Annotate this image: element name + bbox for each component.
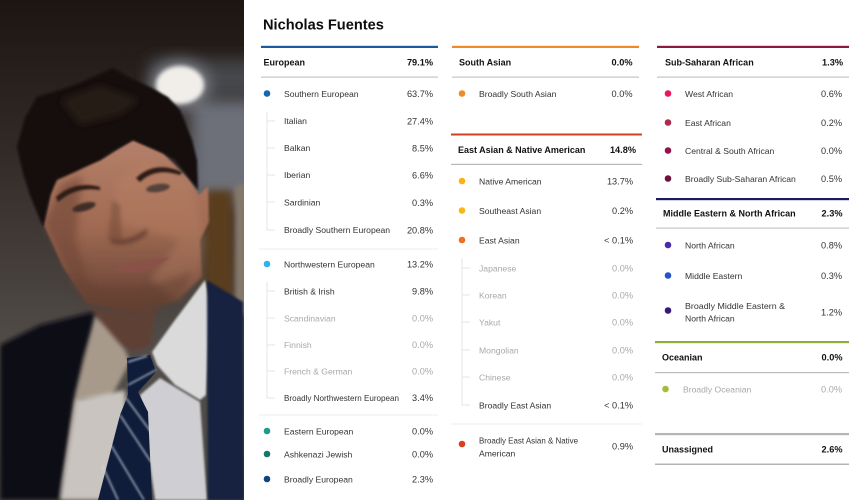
row: Broadly East Asian & Native American: 0.9% bbox=[612, 442, 633, 452]
row: Broadly Middle Eastern & North African: 1.2% bbox=[821, 308, 842, 318]
row: Broadly South Asian: 0.0% bbox=[612, 89, 632, 99]
row: Broadly Northwestern European: Broadly Northwestern European bbox=[284, 393, 399, 403]
panel: European bbox=[259, 46, 438, 485]
row: Southern European bbox=[264, 89, 433, 99]
row: Broadly European: Broadly European bbox=[284, 474, 353, 484]
row: East Asian bbox=[459, 236, 633, 246]
row: Middle Eastern bbox=[665, 271, 842, 281]
panel: Unassigned: 2.6% bbox=[822, 444, 842, 454]
panel: East Asian & Native American: 14.8% bbox=[610, 145, 636, 155]
panel: East Asian & Native American: East Asian & Native American bbox=[458, 145, 585, 155]
row: Southern European: Southern European bbox=[284, 89, 359, 99]
row: Chinese: Chinese bbox=[479, 372, 511, 382]
row: Korean: 0.0% bbox=[612, 290, 633, 300]
row: Broadly East Asian & Native American: Broadly East Asian & Native bbox=[479, 436, 578, 446]
row: Southern European: 63.7% bbox=[407, 89, 433, 99]
row: Broadly Middle Eastern & North African: North African bbox=[685, 314, 735, 324]
row: Iberian: Iberian bbox=[284, 170, 310, 180]
row: Yakut: 0.0% bbox=[612, 318, 633, 328]
row: Broadly East Asian: Broadly East Asian bbox=[479, 400, 551, 410]
row: Broadly European: 2.3% bbox=[412, 474, 433, 484]
row: Eastern European: Eastern European bbox=[284, 426, 353, 436]
row: Mongolian bbox=[479, 346, 633, 356]
row: Broadly East Asian bbox=[479, 400, 633, 410]
row: West African: West African bbox=[685, 89, 733, 99]
row: Broadly Southern European: Broadly Southern European bbox=[284, 225, 390, 235]
row: Broadly Sub-Saharan African: 0.5% bbox=[821, 174, 842, 184]
row: Sardinian: Sardinian bbox=[284, 198, 321, 208]
row: Broadly East Asian: < 0.1% bbox=[604, 400, 633, 410]
row: Korean: Korean bbox=[479, 290, 507, 300]
row: Balkan bbox=[284, 143, 433, 154]
row: Southeast Asian: Southeast Asian bbox=[479, 206, 541, 216]
row: Balkan: Balkan bbox=[284, 143, 310, 153]
row: Central & South African: Central & South African bbox=[685, 146, 775, 156]
row: Native American bbox=[459, 176, 633, 186]
panel: portrait photo bbox=[0, 0, 260, 500]
title: Nicholas Fuentes bbox=[263, 18, 384, 34]
row: North African bbox=[665, 240, 842, 250]
row: Scandinavian: 0.0% bbox=[412, 314, 433, 324]
row: Broadly Oceanian: Broadly Oceanian bbox=[683, 384, 752, 394]
row: Broadly East Asian & Native American: American bbox=[479, 448, 516, 458]
row: British & Irish: British & Irish bbox=[284, 286, 335, 296]
panel: Sub-Saharan African: 1.3% bbox=[822, 58, 843, 68]
row: Broadly Northwestern European: 3.4% bbox=[412, 393, 433, 403]
row: French & German: French & German bbox=[284, 366, 353, 376]
row: Finnish: Finnish bbox=[284, 340, 312, 350]
row: Japanese: Japanese bbox=[479, 264, 516, 274]
panel: South Asian bbox=[452, 46, 639, 99]
row: Eastern European bbox=[264, 426, 433, 436]
row: West African: 0.6% bbox=[821, 89, 842, 99]
row: North African: 0.8% bbox=[821, 240, 842, 250]
row: Ashkenazi Jewish: Ashkenazi Jewish bbox=[284, 450, 353, 460]
row: Korean bbox=[479, 290, 633, 300]
row: Broadly Oceanian bbox=[662, 384, 842, 394]
row: Balkan: 8.5% bbox=[412, 144, 433, 154]
panel: European: European bbox=[264, 58, 305, 68]
row: Northwestern European: 13.2% bbox=[407, 260, 433, 270]
row: Finnish bbox=[284, 340, 433, 350]
panel: Unassigned: Unassigned bbox=[662, 444, 713, 454]
row: Broadly Middle Eastern & North African bbox=[665, 301, 842, 324]
row: French & German: 0.0% bbox=[412, 366, 433, 376]
row: Italian bbox=[284, 116, 433, 126]
row: Broadly Sub-Saharan African bbox=[665, 174, 842, 184]
row: East African: 0.2% bbox=[821, 118, 842, 128]
panel: South Asian: 0.0% bbox=[612, 58, 632, 68]
panel: Oceanian: 0.0% bbox=[822, 352, 842, 362]
row: British & Irish: 9.8% bbox=[412, 286, 433, 296]
row: Ashkenazi Jewish: 0.0% bbox=[412, 450, 433, 460]
row: East African bbox=[665, 118, 842, 128]
panel: Sub-Saharan African bbox=[657, 46, 849, 184]
row: Broadly Sub-Saharan African: Broadly Sub-Saharan African bbox=[685, 174, 796, 184]
row: Broadly European bbox=[264, 474, 433, 484]
row: Finnish: 0.0% bbox=[412, 340, 433, 350]
row: Yakut bbox=[479, 318, 633, 328]
row: East African: East African bbox=[685, 118, 731, 128]
panel: Middle Eastern & North African: 2.3% bbox=[822, 208, 842, 218]
row: Southeast Asian: 0.2% bbox=[612, 206, 633, 216]
row: East Asian: < 0.1% bbox=[604, 236, 633, 246]
icon: striped tie bbox=[98, 355, 156, 500]
row: North African: North African bbox=[685, 240, 735, 250]
row: Japanese: 0.0% bbox=[612, 264, 633, 274]
row: French & German bbox=[284, 366, 433, 376]
row: Central & South African: 0.0% bbox=[821, 146, 842, 156]
panel: Middle Eastern & North African: Middle Eastern & North African bbox=[663, 208, 796, 218]
row: British & Irish bbox=[284, 286, 433, 296]
row: West African bbox=[665, 89, 842, 99]
row: Broadly South Asian: Broadly South Asian bbox=[479, 89, 557, 99]
row: Italian: 27.4% bbox=[407, 116, 433, 126]
row: Broadly Middle Eastern & North African: Broadly Middle Eastern & bbox=[685, 301, 785, 311]
panel: Oceanian bbox=[655, 341, 849, 394]
row: Broadly South Asian bbox=[459, 89, 632, 99]
row: Iberian bbox=[284, 170, 433, 180]
row: Chinese bbox=[479, 372, 633, 382]
panel: Middle Eastern & North African bbox=[656, 198, 849, 324]
row: Middle Eastern: 0.3% bbox=[821, 271, 842, 281]
row: Eastern European: 0.0% bbox=[412, 426, 433, 436]
row: Ashkenazi Jewish bbox=[264, 450, 433, 460]
row: Native American: 13.7% bbox=[607, 176, 633, 186]
row: Sardinian bbox=[284, 198, 433, 208]
panel: Sub-Saharan African: Sub-Saharan African bbox=[665, 58, 754, 68]
row: Scandinavian bbox=[284, 314, 433, 324]
row: Mongolian: Mongolian bbox=[479, 346, 519, 356]
row: Mongolian: 0.0% bbox=[612, 346, 633, 356]
panel: Unassigned bbox=[655, 433, 849, 465]
panel: Oceanian: Oceanian bbox=[662, 352, 703, 362]
row: Broadly East Asian & Native American bbox=[459, 436, 633, 458]
row: Northwestern European bbox=[264, 260, 433, 270]
row: Sardinian: 0.3% bbox=[412, 198, 433, 208]
row: Middle Eastern: Middle Eastern bbox=[685, 271, 743, 281]
panel: South Asian: South Asian bbox=[459, 58, 511, 68]
row: Central & South African bbox=[665, 146, 842, 156]
row: Yakut: Yakut bbox=[479, 318, 501, 328]
panel: European: 79.1% bbox=[407, 58, 433, 68]
row: Native American: Native American bbox=[479, 176, 542, 186]
row: Chinese: 0.0% bbox=[612, 372, 633, 382]
row: Italian: Italian bbox=[284, 116, 307, 126]
row: Japanese bbox=[479, 264, 633, 274]
row: Broadly Oceanian: 0.0% bbox=[821, 384, 842, 394]
row: Scandinavian: Scandinavian bbox=[284, 314, 336, 324]
row: Iberian: 6.6% bbox=[412, 170, 433, 180]
row: Broadly Southern European: 20.8% bbox=[407, 226, 433, 236]
row: East Asian: East Asian bbox=[479, 236, 520, 246]
panel: East Asian & Native American bbox=[451, 134, 642, 458]
row: Southeast Asian bbox=[459, 206, 633, 216]
row: Broadly Southern European bbox=[284, 225, 433, 236]
row: Northwestern European: Northwestern European bbox=[284, 260, 375, 270]
